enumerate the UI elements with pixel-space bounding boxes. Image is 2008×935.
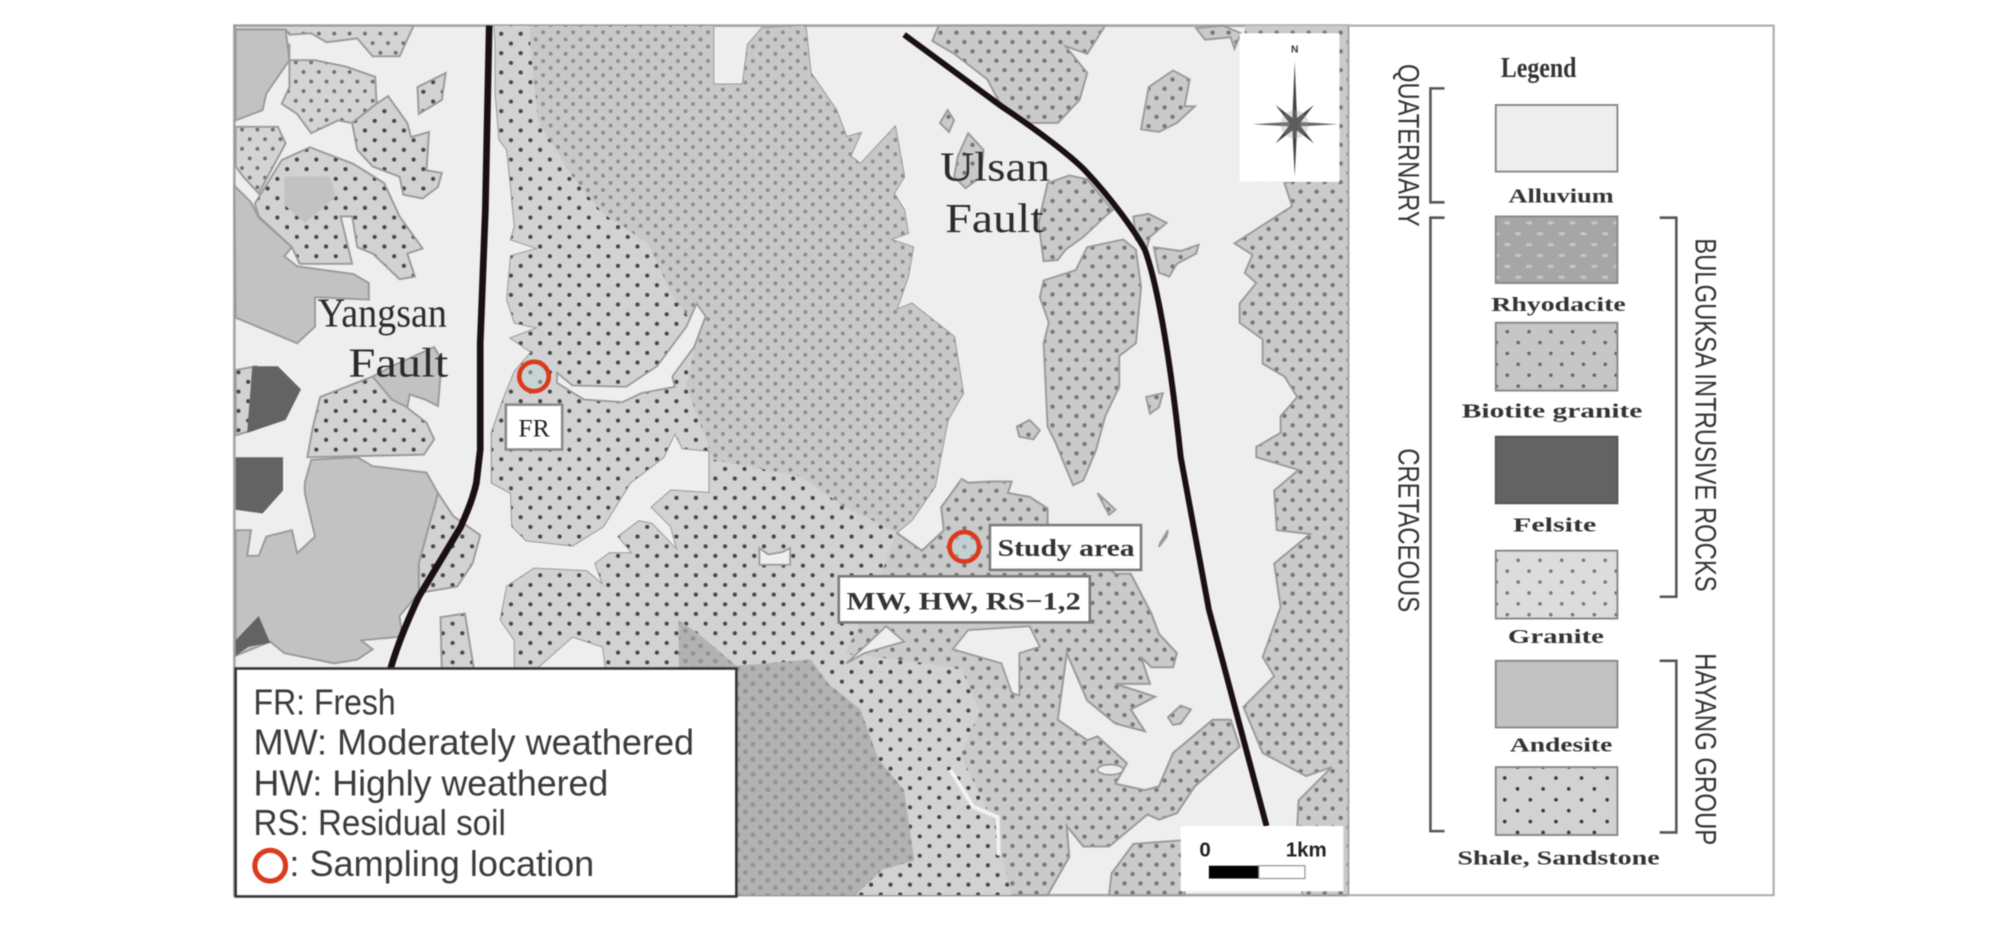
eastern rock units (932, 26, 1348, 895)
swatch: felsite (1496, 437, 1617, 536)
key line: highly weathered: HW: Highly weathered (254, 763, 608, 803)
sampling marker: FR (519, 362, 549, 391)
swatch: rhyodacite: Rhyodacite (1491, 294, 1626, 316)
swatch: biotite granite: Biotite granite (1462, 400, 1642, 422)
bracket: quaternary (1430, 88, 1445, 202)
group label: Hayang group: HAYANG GROUP (1689, 653, 1722, 845)
callout: FR: FR (518, 414, 551, 443)
callout: sample codes (839, 576, 1090, 622)
sampling marker: study area (950, 532, 979, 562)
key: sample abbreviations (236, 668, 736, 896)
key line: fresh: FR: Fresh (254, 683, 396, 723)
swatch: felsite: Felsite (1513, 514, 1596, 536)
swatch: granite: Granite (1508, 626, 1604, 648)
swatch: rhyodacite (1491, 216, 1626, 316)
scale bar: 1km (1286, 839, 1327, 862)
label: Yangsan Fault: Yangsan (318, 290, 447, 336)
bracket: cretaceous (1430, 218, 1445, 831)
key line: residual soil: RS: Residual soil (254, 803, 506, 843)
alluvium background (234, 26, 1348, 895)
callout: study area (990, 525, 1141, 570)
shale, biotite and rhyodacite zones inside the mass (487, 26, 1012, 895)
swatch: shale, sandstone: Shale, Sandstone (1457, 847, 1660, 869)
scale bar: 0 (1199, 839, 1211, 862)
legend heading: Legend (1501, 53, 1577, 84)
panel: legend (1348, 26, 1774, 895)
callout: study area: Study area (998, 535, 1135, 562)
swatch: andesite: Andesite (1510, 735, 1612, 757)
callout: FR (506, 405, 562, 450)
central rock mass (492, 26, 1240, 895)
panel: geological map (234, 26, 1348, 896)
key line: moderately weathered: MW: Moderately weathered (254, 722, 694, 762)
callout: sample codes: MW, HW, RS−1,2 (846, 587, 1081, 616)
swatch: andesite (1496, 661, 1617, 757)
swatch: granite (1496, 551, 1617, 648)
icon: sampling ring (255, 850, 286, 881)
group label: Bulguksa intrusive rocks: BULGUKSA INTRUSIVE ROCKS (1689, 238, 1722, 592)
label: Ulsan: Ulsan (940, 144, 1050, 190)
icon: north arrow: N (1291, 45, 1298, 56)
bracket: Hayang (1660, 661, 1676, 832)
swatch: alluvium (1496, 105, 1617, 207)
fault: Ulsan (904, 35, 1267, 826)
alluvium inlets (557, 304, 1123, 855)
period label: cretaceous: CRETACEOUS (1391, 448, 1424, 612)
icon: north arrow (1240, 33, 1340, 182)
swatch: biotite granite (1462, 323, 1642, 422)
key line: sampling location: : Sampling location (289, 844, 594, 884)
swatch: alluvium: Alluvium (1509, 185, 1614, 207)
label: Fault under Yangsan: Fault (348, 340, 449, 386)
bracket: Bulguksa (1660, 218, 1676, 597)
scale bar (1181, 826, 1343, 891)
period label: quaternary: QUATERNARY (1391, 64, 1424, 227)
western rock units (234, 26, 480, 668)
swatch: shale, sandstone (1457, 767, 1660, 869)
fault: Yangsan (391, 26, 489, 668)
label: Fault under Ulsan: Fault (945, 195, 1044, 241)
